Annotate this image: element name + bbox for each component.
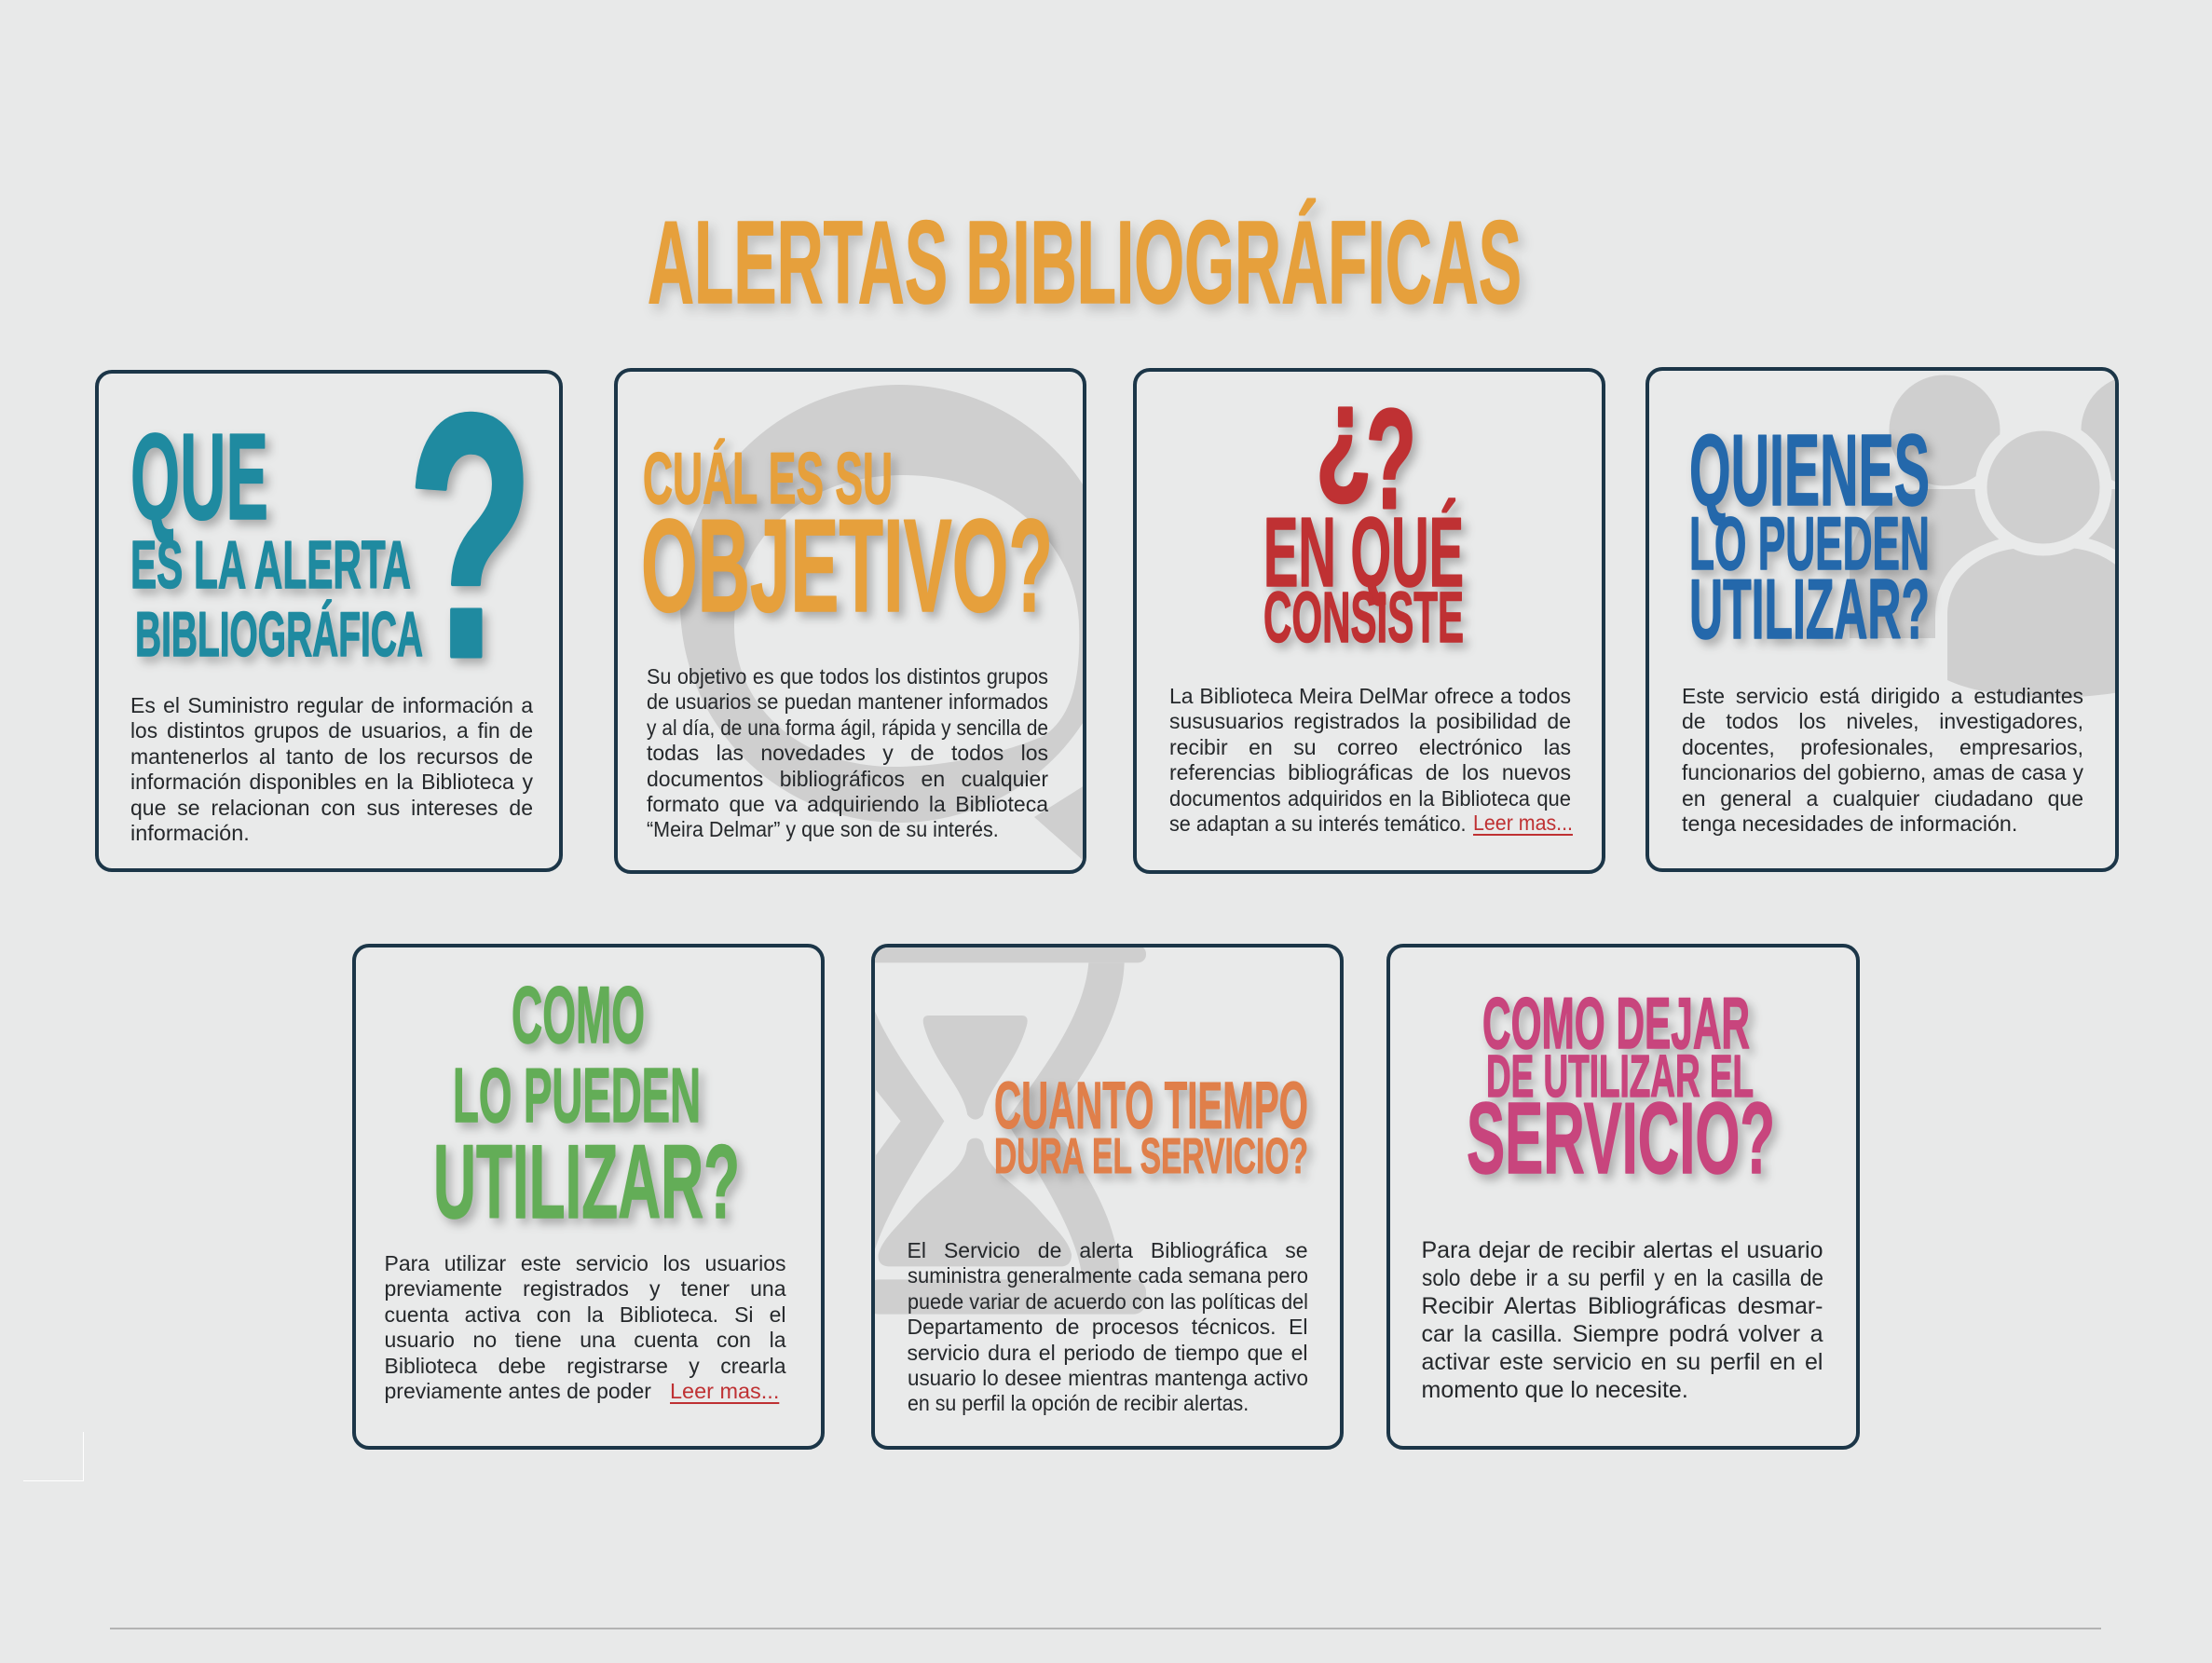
- footer rule: [110, 1628, 2101, 1629]
- text: cuanto tiempo: [908, 1238, 1308, 1415]
- text: en qué consiste: documentos adquiridos en la Biblioteca que: [1169, 786, 1571, 811]
- heading: como lo pueden utilizar: [433, 971, 740, 1240]
- heading: que es la alerta bibliográfica: QUE: [130, 408, 268, 545]
- panel: que es la alerta: [95, 370, 563, 872]
- panel: quienes: [1645, 367, 2119, 872]
- text: como dejar: Para dejar de recibir alertas el usuario: [1422, 1237, 1823, 1263]
- text: cuanto tiempo: Departamento de procesos técnicos. El: [908, 1315, 1308, 1339]
- text: quienes: en general a cualquier ciudadano que: [1682, 786, 2083, 811]
- text: como lo pueden utilizar: Biblioteca debe registrarse y crearla: [384, 1354, 786, 1378]
- text: como dejar: activar este servicio en su perfil en el: [1422, 1349, 1823, 1375]
- heading: cuál es su objetivo: CUÁL ES SU: [643, 437, 893, 519]
- text: cuanto tiempo: puede variar de acuerdo con las políticas del: [908, 1289, 1307, 1314]
- panel: como dejar: [1386, 944, 1860, 1450]
- text: que es la alerta: [130, 693, 533, 845]
- corner mark: [23, 1432, 84, 1481]
- text: que es la alerta: Es el Suministro regular de información a: [130, 693, 533, 717]
- text: como lo pueden utilizar: previamente registrados y tener una: [384, 1276, 786, 1301]
- text: como dejar: momento que lo necesite.: [1422, 1377, 1688, 1403]
- text: cuanto tiempo: El Servicio de alerta Bibliográfica se: [908, 1238, 1308, 1262]
- text: cuanto tiempo: en su perfil la opción de recibir alertas.: [908, 1391, 1249, 1415]
- text: quienes: Este servicio está dirigido a estudiantes: [1682, 684, 2083, 708]
- text: objetivo: todas las novedades y de todos los: [647, 741, 1048, 765]
- panel: objetivo: [614, 368, 1086, 874]
- text: objetivo: [647, 664, 1049, 841]
- text: que es la alerta: que se relacionan con sus intereses de: [130, 796, 533, 820]
- text: que es la alerta: información.: [130, 821, 250, 845]
- text: que es la alerta: los distintos grupos de usuarios, a fin de: [130, 718, 533, 743]
- text: quienes: tenga necesidades de información.: [1682, 811, 2017, 836]
- link: leer mas: Leer mas...: [669, 1379, 779, 1403]
- text: como lo pueden utilizar: [384, 1251, 786, 1404]
- text: en qué consiste: recibir en su correo electrónico las: [1169, 735, 1571, 759]
- heading: en qué consiste: [1263, 357, 1464, 658]
- heading: en qué consiste: ?: [1366, 380, 1416, 538]
- text: como dejar: Recibir Alertas Bibliográficas desmar-: [1422, 1293, 1823, 1319]
- text: como lo pueden utilizar: Para utilizar este servicio los usuarios: [384, 1251, 786, 1275]
- text: en qué consiste: La Biblioteca Meira DelMar ofrece a todos: [1169, 684, 1571, 708]
- panel: como lo pueden utilizar: [352, 944, 825, 1450]
- icon: magnifying glass: [680, 385, 1118, 868]
- text: en qué consiste: se adaptan a su interés temático.: [1169, 811, 1466, 836]
- text: como dejar: [1422, 1237, 1823, 1403]
- text: como dejar: car la casilla. Siempre podrá volver a: [1422, 1321, 1823, 1347]
- text: objetivo: de usuarios se puedan mantener informados: [647, 689, 1048, 714]
- text: objetivo: formato que va adquiriendo la Biblioteca: [647, 792, 1048, 816]
- text: quienes: [1682, 684, 2083, 836]
- text: objetivo: documentos bibliográficos en cualquier: [647, 767, 1048, 791]
- icon: hourglass: [826, 946, 1146, 1315]
- heading: quienes lo pueden utilizar: UTILIZAR?: [1689, 563, 1930, 657]
- heading: quienes lo pueden utilizar: [1689, 414, 1930, 657]
- text: cuanto tiempo: servicio dura el periodo de tiempo que el: [908, 1341, 1308, 1365]
- text: cuanto tiempo: suministra generalmente cada semana pero: [908, 1263, 1307, 1288]
- link: leer mas: Leer mas...: [1473, 811, 1573, 835]
- text: quienes: docentes, profesionales, empresarios,: [1682, 735, 2083, 759]
- text: como lo pueden utilizar: previamente antes de poder: [384, 1379, 651, 1403]
- text: quienes: funcionarios del gobierno, amas de casa y: [1682, 760, 2083, 784]
- text: en qué consiste: sususuarios registrados la posibilidad de: [1169, 709, 1571, 733]
- icon: group of people: [1850, 374, 2199, 698]
- text: en qué consiste: referencias bibliográficas de los nuevos: [1169, 760, 1571, 784]
- panel: en qué consiste: [1133, 368, 1605, 874]
- text: objetivo: “Meira Delmar” y que son de su interés.: [647, 817, 999, 841]
- text: quienes: de todos los niveles, investigadores,: [1682, 709, 2083, 733]
- heading: cuál es su objetivo: [641, 437, 1053, 640]
- text: objetivo: Su objetivo es que todos los distintos grupos: [647, 664, 1048, 688]
- text: como lo pueden utilizar: usuario no tiene una cuenta con la: [384, 1328, 786, 1352]
- text: objetivo: y al día, de una forma ágil, rápida y sencilla de: [647, 716, 1048, 740]
- text: cuanto tiempo: usuario lo desee mientras mantenga activo: [908, 1366, 1307, 1390]
- panel: cuanto tiempo: [871, 944, 1344, 1450]
- text: como dejar: solo debe ir a su perfil y en la casilla de: [1422, 1265, 1823, 1291]
- heading: cuanto tiempo dura el servicio: [994, 1070, 1308, 1184]
- heading: como lo pueden utilizar: COMO: [512, 971, 645, 1060]
- text: en qué consiste: [1169, 684, 1573, 836]
- text: como lo pueden utilizar: cuenta activa con la Biblioteca. Si el: [384, 1302, 786, 1327]
- heading: que es la alerta bibliográfica: [130, 342, 534, 729]
- text: que es la alerta: información disponibles en la Biblioteca y: [130, 770, 533, 794]
- heading: como dejar de utilizar el servicio: [1467, 982, 1775, 1195]
- text: que es la alerta: mantenerlos al tanto de los recursos de: [130, 744, 533, 769]
